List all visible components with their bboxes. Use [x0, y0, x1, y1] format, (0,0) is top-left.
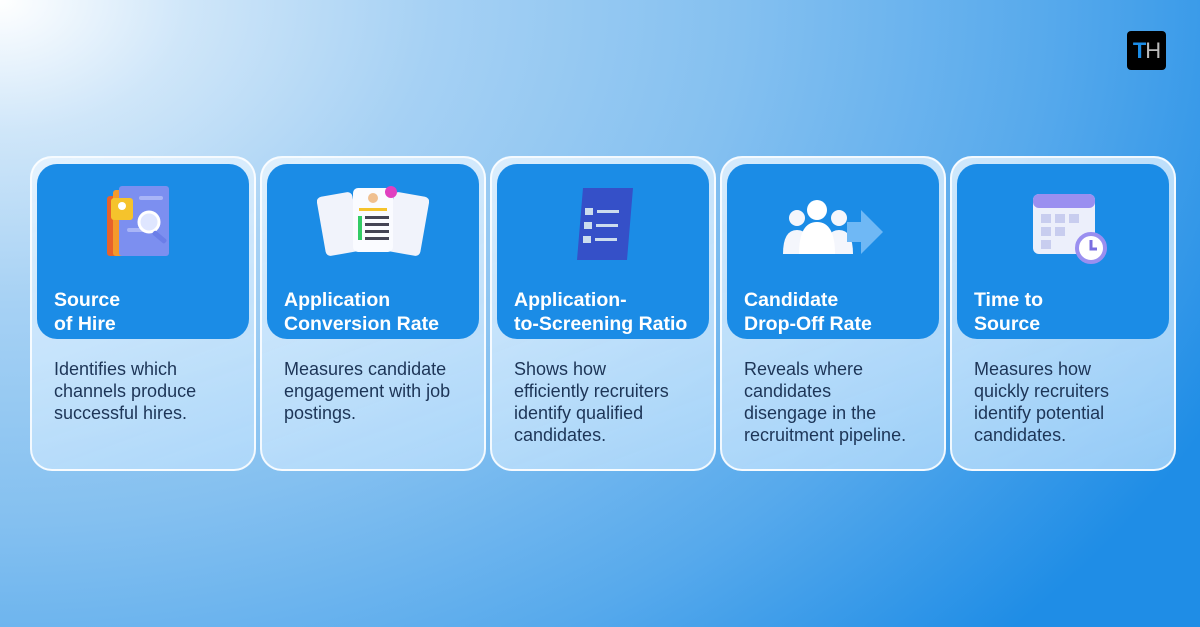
title: Candidate [744, 289, 838, 311]
description: Shows how [514, 359, 606, 379]
description [284, 359, 450, 423]
logo [1127, 31, 1166, 70]
description [744, 359, 906, 445]
description: engagement with job [284, 381, 450, 401]
description: Reveals where [744, 359, 863, 379]
description: Measures candidate [284, 359, 446, 379]
title [514, 289, 687, 335]
title: Source [54, 289, 120, 311]
card: application conversion rate [260, 156, 486, 471]
description: quickly recruiters [974, 381, 1109, 401]
title: Time to [974, 289, 1043, 311]
title [974, 289, 1043, 335]
icon: resumes [317, 186, 429, 256]
icon: document search [107, 186, 169, 256]
description: Measures how [974, 359, 1091, 379]
card: candidate drop-off rate [720, 156, 946, 471]
description: channels produce [54, 381, 196, 401]
description: successful hires. [54, 403, 187, 423]
description: disengage in the [744, 403, 876, 423]
title [54, 289, 120, 335]
description: identify potential [974, 403, 1104, 423]
logo: TH [1133, 38, 1160, 63]
card: source of hire [30, 156, 256, 471]
icon: people with arrow [783, 200, 883, 254]
title: Drop-Off Rate [744, 313, 872, 335]
description: postings. [284, 403, 356, 423]
description [514, 359, 669, 445]
description: efficiently recruiters [514, 381, 669, 401]
title: Application [284, 289, 390, 311]
title: Conversion Rate [284, 313, 439, 335]
description [974, 359, 1109, 445]
title: Application- [514, 289, 627, 311]
description: candidates. [974, 425, 1066, 445]
description: candidates. [514, 425, 606, 445]
title: of Hire [54, 313, 116, 335]
card: application-to-screening ratio [490, 156, 716, 471]
icon: checklist [577, 188, 633, 260]
description: recruitment pipeline. [744, 425, 906, 445]
title [744, 289, 872, 335]
description: Identifies which [54, 359, 177, 379]
description: identify qualified [514, 403, 643, 423]
title: to-Screening Ratio [514, 313, 687, 335]
title [284, 289, 439, 335]
title: Source [974, 313, 1040, 335]
icon: calendar clock [1033, 194, 1107, 264]
card: time to source [950, 156, 1176, 471]
description [54, 359, 196, 423]
description: candidates [744, 381, 831, 401]
